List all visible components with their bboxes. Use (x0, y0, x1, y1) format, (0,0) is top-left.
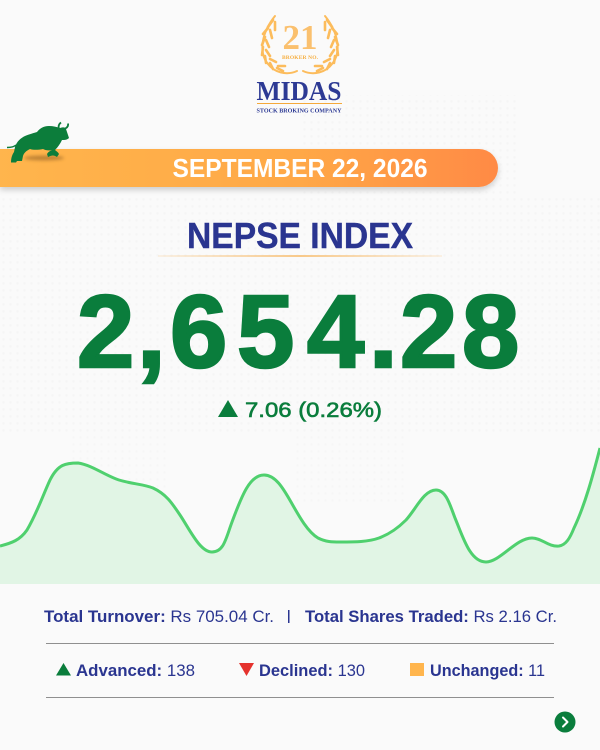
total turnover: Total Turnover: Rs 705.04 Cr. (44, 607, 274, 626)
icon: next arrow button (554, 712, 576, 732)
unchanged: Unchanged: 11 (430, 661, 545, 680)
icon: laurel wreath (262, 16, 338, 73)
icon: up triangle (218, 400, 238, 417)
total shares traded: Total Shares Traded: Rs 2.16 Cr. (305, 607, 557, 626)
date banner (0, 149, 498, 187)
tagline: STOCK BROKING COMPANY (256, 108, 342, 114)
totals row (44, 607, 557, 626)
index value: 2,654.28 (77, 274, 519, 389)
wordmark MIDAS: MIDAS (256, 76, 342, 106)
broker no label: BROKER NO. (282, 55, 319, 61)
heading: NEPSE INDEX: NEPSE INDEX (187, 215, 413, 256)
advanced: Advanced: 138 (76, 661, 195, 680)
declined: Declined: 130 (259, 661, 365, 680)
date: SEPTEMBER 22, 2026 (172, 153, 428, 183)
area line chart (0, 448, 600, 584)
index change: 7.06 (0.26%) (245, 399, 382, 422)
number 21: 21 (282, 18, 318, 57)
icon: green bull (7, 122, 69, 162)
logo: Midas broker 21 (256, 16, 342, 114)
market breadth row (56, 661, 545, 680)
